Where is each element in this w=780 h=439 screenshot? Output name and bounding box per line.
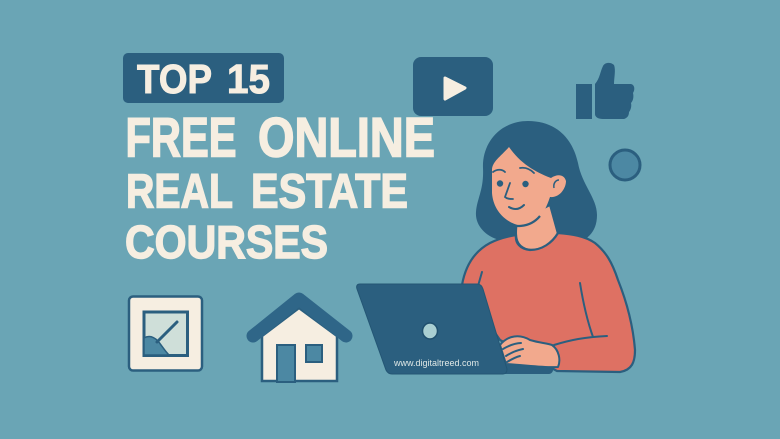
badge: top 15	[123, 53, 284, 103]
icon: house	[253, 299, 346, 382]
sleeve folds	[478, 272, 607, 345]
title: FREE	[126, 106, 236, 168]
title: ESTATE	[251, 166, 408, 218]
hand	[500, 336, 559, 367]
laptop base	[490, 363, 553, 374]
hair	[476, 121, 597, 244]
icon: picture frame	[129, 296, 202, 370]
title: COURSES	[125, 216, 328, 268]
illustration: woman with laptop	[357, 121, 635, 374]
neck	[516, 205, 558, 250]
icon: thumbs up	[576, 63, 634, 119]
laptop	[357, 284, 507, 374]
title: REAL	[126, 166, 233, 218]
icon: circle	[610, 150, 640, 180]
badge: top 15: 15	[227, 56, 270, 102]
icon: video play button	[413, 57, 493, 116]
badge: top 15: TOP	[137, 56, 212, 102]
face	[492, 147, 566, 226]
website url: www.digitaltreed.com	[393, 358, 479, 368]
sweater	[462, 233, 635, 372]
title	[125, 106, 435, 268]
title: ONLINE	[258, 106, 435, 168]
